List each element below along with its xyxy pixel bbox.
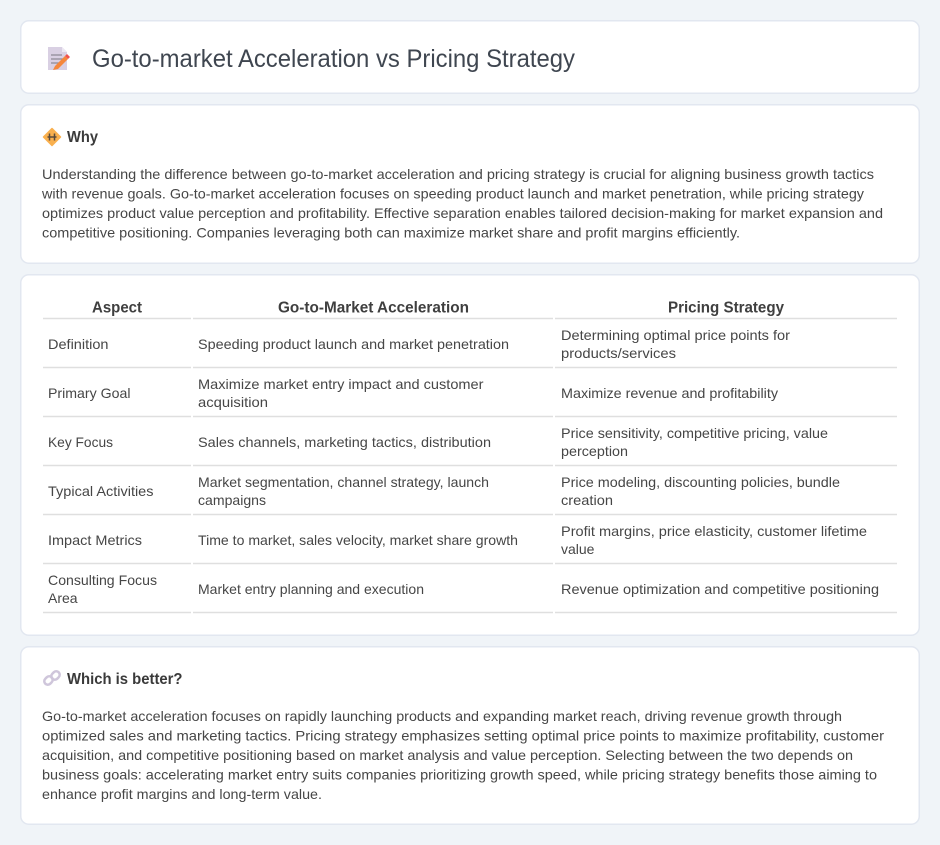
table header: Pricing Strategy [668,300,784,316]
row: consulting focus area: Revenue optimization and competitive positioning [561,581,879,597]
text block: which is better: acquisition, and competitive positioning based on market analysis and value perception. Selecting between the two depends on [42,747,853,763]
row: primary goal: Maximize market entry impact and customer [198,376,484,392]
row: typical activities: Market segmentation, channel strategy, launch [198,474,489,490]
row: key focus: Price sensitivity, competitive pricing, value [561,425,828,441]
row: consulting focus area: Consulting Focus [48,572,157,588]
text block: which is better: optimized sales and marketing tactics. Pricing strategy emphasizes setting optimal price points to maximize profitability, customer [42,728,884,744]
row: definition: Determining optimal price points for [561,327,790,343]
row: key focus [48,425,828,459]
icon: warning diamond [44,128,60,146]
text block: why: competitive positioning. Companies leveraging both can maximize market share and profit margins efficiently. [42,224,740,240]
row: impact metrics: Impact Metrics [48,532,142,548]
row: impact metrics: Profit margins, price elasticity, customer lifetime [561,523,867,539]
row: consulting focus area [48,572,879,606]
heading: why: Why [67,129,98,146]
row: definition: Speeding product launch and market penetration [198,336,509,352]
row: definition: Definition [48,336,108,352]
row: key focus: Sales channels, marketing tactics, distribution [198,434,491,450]
row: typical activities: Price modeling, discounting policies, bundle [561,474,840,490]
row: impact metrics [48,523,867,557]
row: definition: products/services [561,345,676,361]
text block: which is better: Go-to-market acceleration focuses on rapidly launching products and expanding market reach, driving revenue growth through [42,708,842,724]
panel: which is better [21,647,919,824]
row: key focus: perception [561,443,628,459]
text block: why: Understanding the difference between go-to-market acceleration and pricing strategy is crucial for aligning business growth tactics [42,166,874,182]
text block: why: optimizes product value perception and profitability. Effective separation enables tailored decision-making for market expansion and [42,205,883,221]
text block: why: with revenue goals. Go-to-market acceleration focuses on speeding product launch and market penetration, while pricing strategy [41,186,864,202]
row: typical activities: campaigns [198,492,266,508]
row: impact metrics: value [561,541,595,557]
row: typical activities: creation [561,492,613,508]
row: typical activities: Typical Activities [48,483,154,499]
row: consulting focus area: Area [48,590,78,606]
icon: memo with pencil [48,47,70,70]
title: Go-to-market Acceleration vs Pricing Strategy [92,45,575,73]
text block: why [41,166,883,240]
table header [92,300,784,316]
text block: which is better [42,708,884,802]
row: consulting focus area: Market entry planning and execution [198,581,424,597]
panel: comparison table [21,275,919,635]
row: typical activities [48,474,840,508]
heading: which is better: Which is better? [67,671,182,688]
panel: header [21,21,919,93]
text block: which is better: business goals: accelerating market entry suits companies prioritizing growth speed, while pricing strategy benefits those aiming to [42,766,877,782]
row: primary goal: acquisition [198,394,268,410]
icon: link [43,670,61,686]
row: definition [48,327,790,361]
text block: which is better: enhance profit margins and long-term value. [42,786,322,802]
row: key focus: Key Focus [48,434,113,450]
row: primary goal [48,376,778,410]
row: primary goal: Maximize revenue and profitability [561,385,778,401]
row: impact metrics: Time to market, sales velocity, market share growth [198,532,518,548]
row: primary goal: Primary Goal [48,385,130,401]
table header: Go-to-Market Acceleration [278,300,469,316]
table header: Aspect [92,300,143,316]
panel: why [21,105,919,263]
